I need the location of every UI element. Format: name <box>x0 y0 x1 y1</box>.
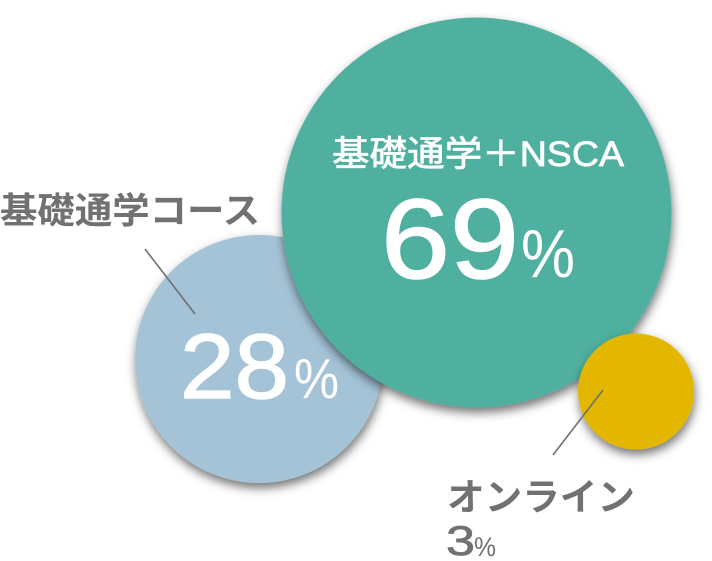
leader line: オンライン <box>553 390 603 455</box>
label: 基礎通学コース: 基礎通学コース <box>0 190 260 231</box>
unit: %: % <box>521 216 575 292</box>
label: オンライン: オンライン <box>447 477 635 518</box>
bubble: 基礎通学コース 28% <box>135 235 383 483</box>
value: 28: 28 <box>180 316 289 418</box>
unit: %: % <box>294 347 339 411</box>
bubble: オンライン <box>578 334 694 450</box>
heading: 基礎通学+NSCA: 基礎通学＋NSCA <box>332 135 625 174</box>
value: 69: 69 <box>381 176 519 302</box>
leader line: 基礎通学コース <box>145 249 195 314</box>
bubble: 基礎通学+NSCA 69% <box>282 18 672 408</box>
